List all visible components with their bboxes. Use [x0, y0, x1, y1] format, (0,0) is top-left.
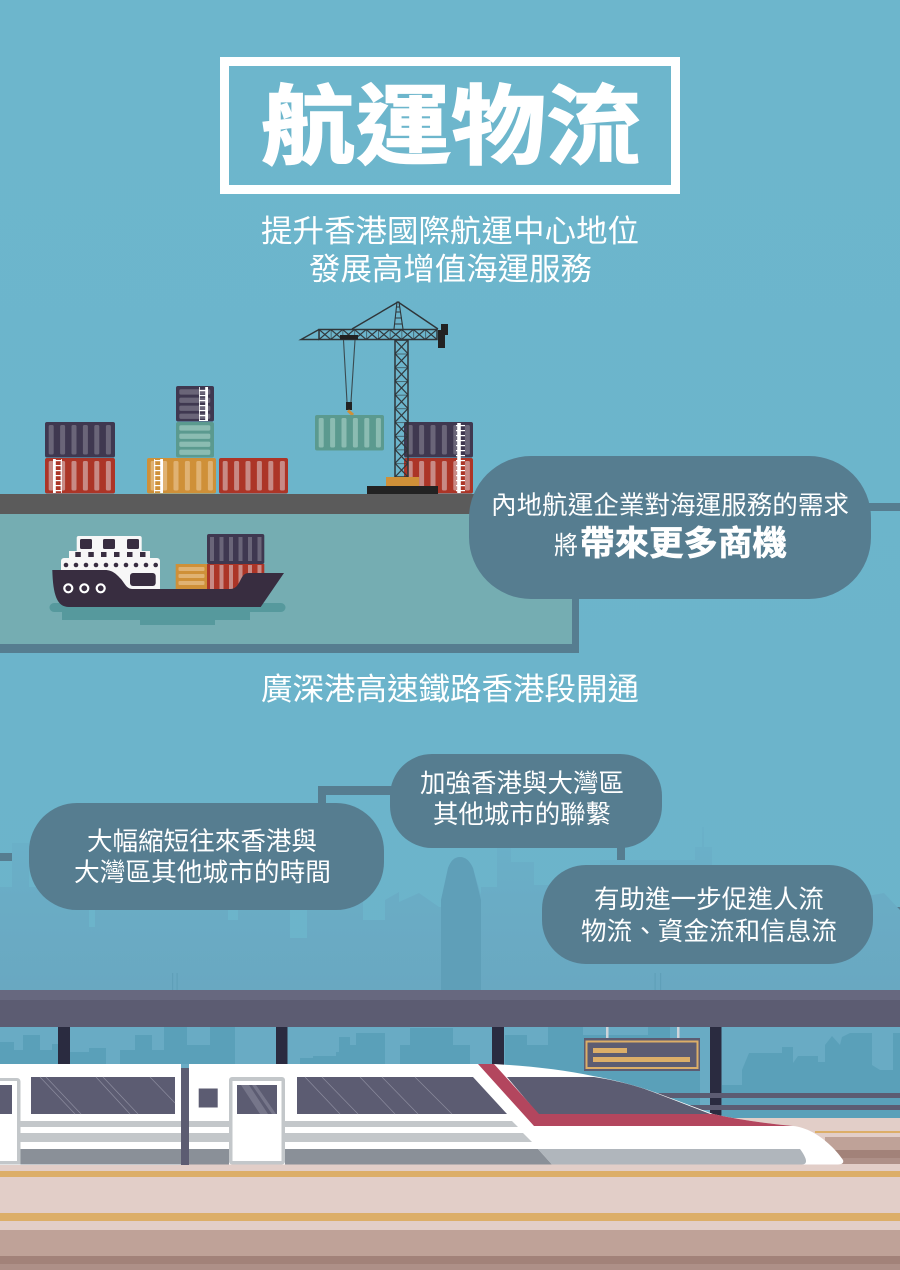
icon: cargo ship [50, 534, 286, 625]
title box [224, 62, 676, 190]
subtitle [261, 214, 639, 287]
panel: harbour water [0, 514, 579, 653]
connector lines [0, 503, 900, 915]
water shadow [50, 603, 286, 625]
city skyline upper [0, 827, 900, 990]
hanging container [315, 415, 384, 450]
station backdrop skyline [0, 1027, 900, 1125]
window glare [40, 1077, 452, 1114]
front door [229, 1077, 285, 1164]
bubble: shorter travel times: 大幅縮短往來香港與 [87, 828, 317, 856]
bubble: flows [542, 865, 873, 964]
subtitle: 發展高增值海運服務 [309, 252, 592, 287]
bubble: shorter travel times [29, 803, 384, 910]
platform roof beam [0, 990, 900, 1027]
background rails [655, 1093, 900, 1110]
train body [0, 1064, 843, 1165]
section heading: rail: 廣深港高速鐵路香港段開通 [261, 672, 639, 707]
superstructure [61, 536, 160, 590]
bubble: shorter travel times: 大灣區其他城市的時間 [74, 859, 331, 887]
bubble: flows: 物流、資金流和信息流 [581, 918, 837, 946]
windows [31, 1077, 507, 1114]
bubble: stronger links: 加強香港與大灣區 [420, 770, 624, 798]
icon: tower crane [301, 302, 448, 494]
roof posts [58, 1027, 722, 1117]
high-speed train [0, 1064, 843, 1165]
title: 航運物流 [261, 79, 641, 176]
lower skirt [20, 1149, 806, 1164]
red livery [478, 1064, 793, 1126]
ship containers [176, 534, 264, 590]
hull [52, 570, 284, 607]
bubble: mainland demand: 帶來更多商機 [580, 525, 787, 563]
bubble: stronger links [390, 754, 662, 848]
bubble: mainland demand: 將 [554, 532, 578, 560]
rear door [0, 1078, 20, 1164]
quay ground [0, 494, 480, 514]
side stripes [20, 1121, 532, 1142]
bubble: mainland demand: 內地航運企業對海運服務的需求 [491, 492, 849, 520]
nose windscreen [507, 1077, 713, 1115]
bubble: mainland demand [469, 456, 871, 599]
carriage gap [181, 1068, 189, 1165]
portholes [64, 584, 105, 592]
bubble: flows: 有助進一步促進人流 [594, 886, 824, 914]
platform and track bands [0, 1118, 900, 1270]
right container stack [404, 422, 473, 494]
bubble: stronger links: 其他城市的聯繫 [433, 801, 611, 829]
subtitle: 提升香港國際航運中心地位 [261, 214, 639, 249]
middle container stack [147, 386, 288, 494]
departure sign [584, 1027, 700, 1071]
left container stack [45, 422, 115, 494]
